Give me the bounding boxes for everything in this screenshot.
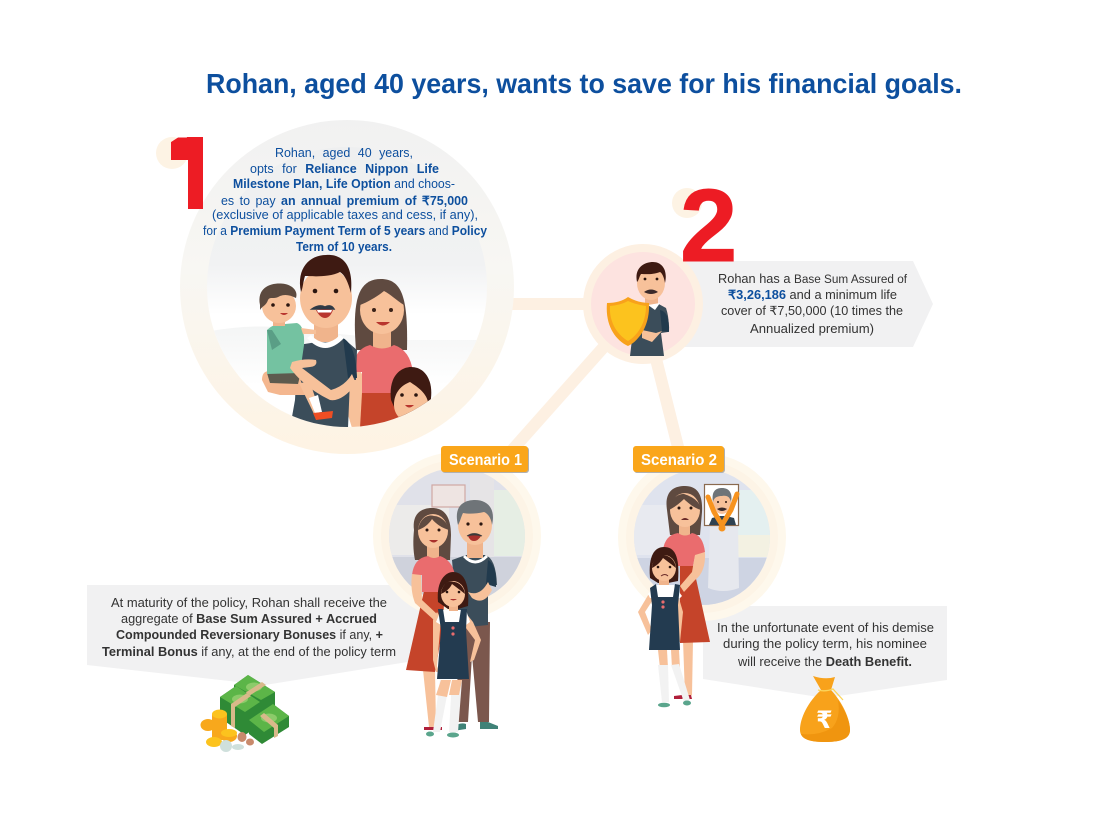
text: scenario 2 description: In the unfortunate event of his demise [717,621,934,635]
step number 1: 1 [153,116,211,232]
step number 2: 2 [680,168,737,283]
icon: rupee money bag: ₹ [816,706,833,734]
right stack [249,704,289,744]
coins [200,719,216,731]
text: scenario 2 description [717,621,934,669]
text: scenario 1 description: Terminal Bonus if any, at the end of the policy term [102,645,396,659]
illustration: family of four [259,255,431,428]
girl [638,547,691,707]
text: step 1 description: opts for Reliance Nippon Life [250,162,439,176]
text: step 1 description: Rohan, aged 40 years, [275,146,413,160]
woman [663,486,710,699]
icon: cash stacks and coins [200,675,289,752]
girl [391,367,431,422]
text: scenario 2 description: will receive the Death Benefit. [737,655,912,669]
white drape [708,524,739,591]
title: Rohan, aged 40 years, wants to save for his financial goals. [206,68,962,99]
text: scenario 1 description: Compounded Reversionary Bonuses if any, + [116,628,383,642]
text: step 1 description [203,146,487,254]
text: step 2 description: Rohan has a Base Sum Assured of [718,272,908,286]
text: scenario 1 description: aggregate of Base Sum Assured + Accrued [121,612,377,626]
panel: step 2 grey arrow [685,261,933,347]
panel: scenario 1 circle [373,452,541,620]
text: step 1 description: for a Premium Payment Term of 5 years and Policy [203,224,487,238]
badge: scenario 1: Scenario 1 [449,452,522,469]
text: step 1 description: Term of 10 years. [296,240,392,254]
text: step 1 description: Milestone Plan, Life Option and choos- [233,177,455,191]
woman [406,508,455,730]
illustration: man with shield [607,262,669,356]
text: step 1 description: (exclusive of applicable taxes and cess, if any), [212,208,478,222]
text: scenario 1 description [102,596,396,659]
panel: scenario 1 grey callout [87,585,420,685]
background hills [214,326,476,342]
panel: step 2 circle [583,244,703,364]
step number 1 [156,137,203,209]
badge: scenario 2 [633,446,725,473]
left stack [220,686,260,735]
top stack [234,675,275,716]
man [452,500,498,731]
text: step 1 description: es to pay an annual premium of ₹75,000 [221,194,468,208]
mother [348,279,416,427]
connector lines [490,304,680,475]
text: step 2 description [718,272,908,336]
text: scenario 1 description: At maturity of the policy, Rohan shall receive the [111,596,387,610]
text: step 2 description: ₹3,26,186 and a minimum life [728,288,897,302]
boy [259,283,356,420]
father [290,255,357,428]
framed portrait with garland [704,484,738,532]
panel: scenario 2 circle [618,453,786,707]
text: step 2 description: cover of ₹7,50,000 (10 times the [721,304,903,318]
icon: rupee money bag [800,676,850,742]
panel: scenario 2 grey callout [703,606,947,698]
badge: scenario 2: Scenario 2 [641,452,717,469]
text: step 2 description: Annualized premium) [750,322,874,336]
text: scenario 2 description: during the policy term, his nominee [723,637,927,651]
girl [426,572,481,738]
badge: scenario 1 [441,446,529,473]
illustration: family at maturity [406,500,498,738]
panel: step 1 family circle [180,120,514,454]
